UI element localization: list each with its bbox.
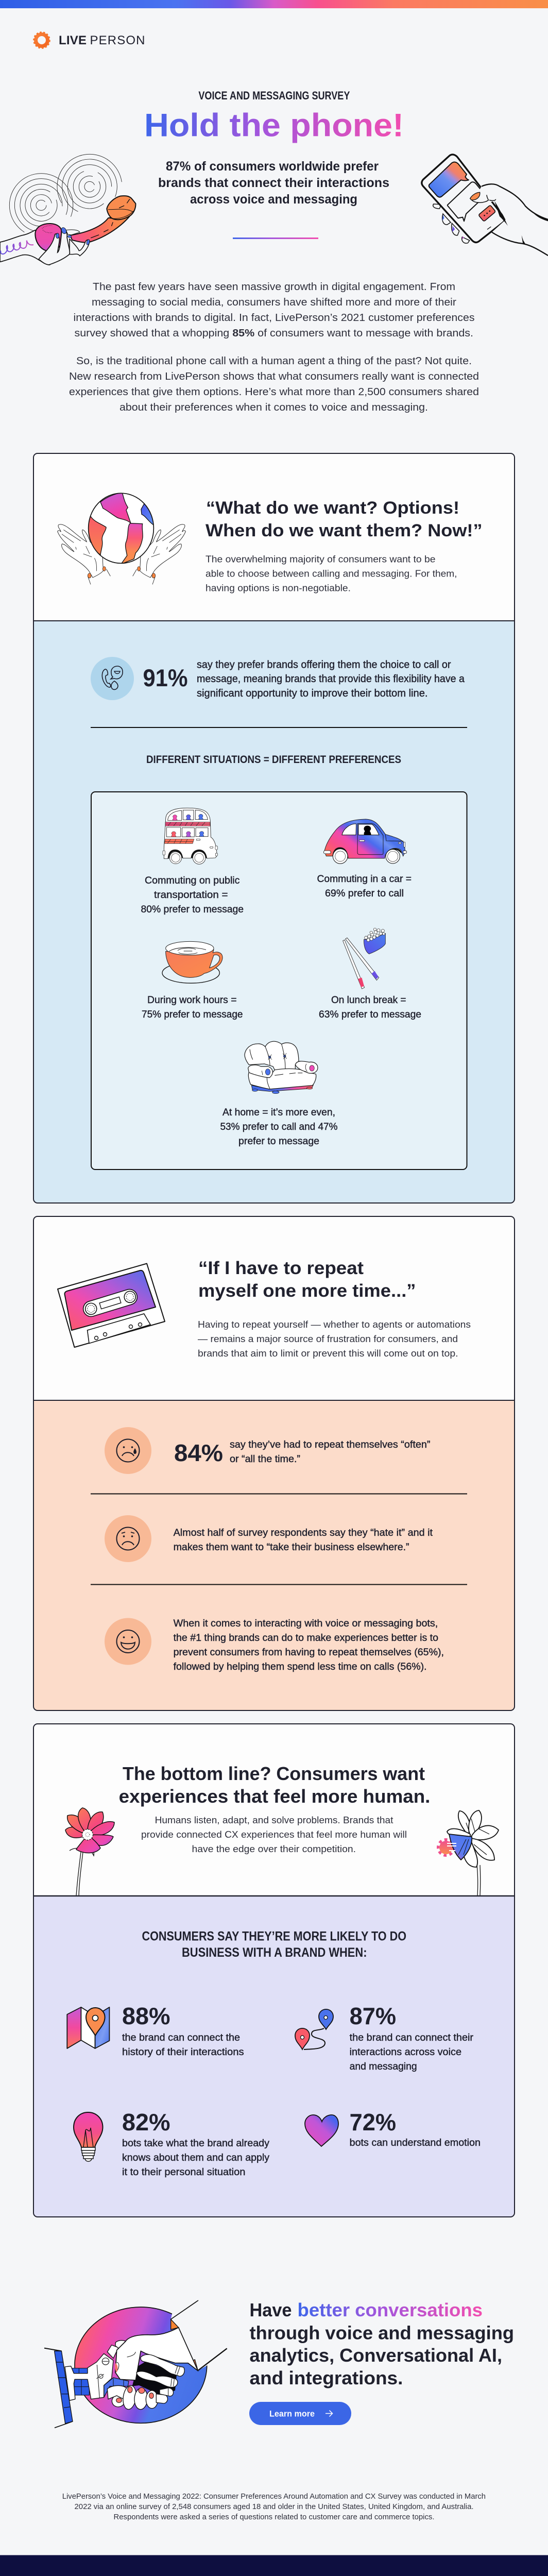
icon: happy face [105,1618,151,1665]
text: hate it: Almost half of survey respondents say they “hate it” and it [174,1528,433,1538]
heading: consumers say: CONSUMERS SAY THEY’RE MORE LIKELY TO DO [142,1929,406,1943]
panel: bottom line card [33,1724,515,2217]
eyebrow: voice and messaging survey: VOICE AND MESSAGING SURVEY [198,89,350,102]
icon: chopsticks and sushi [343,928,385,989]
heading: consumers say [142,1929,406,1960]
intro paragraph 1: messaging to social media, consumers have shifted more and more of their [92,297,456,308]
heading: bottom line [119,1763,430,1807]
heading: consumers say: BUSINESS WITH A BRAND WHEN: [182,1945,367,1960]
stat: 87 percent: 87% [350,2003,396,2029]
top gradient bar [0,0,548,8]
label: at home: 53% prefer to call and 47% [220,1122,338,1132]
label: lunch break: 63% prefer to message [319,1009,421,1020]
logo: LivePerson header: LIVE [59,33,87,47]
stat: 88 percent: 88% [122,2003,170,2029]
text: 82 percent description: knows about them and can apply [122,2153,270,2163]
text: bots repeat: prevent consumers from having to repeat themselves (65%), [174,1647,444,1658]
heading: have better conversations: and integrations. [249,2367,403,2388]
intro paragraph 1: interactions with brands to digital. In fact, LivePerson’s 2021 customer preferences [73,312,475,324]
heading: have better conversations: through voice and messaging [249,2323,514,2343]
text: 72 percent description: bots can understand emotion [350,2138,481,2148]
text: 91 percent description [197,659,465,699]
text: bottom line body: provide connected CX experiences that feel more human will [141,1829,407,1840]
intro paragraph 2: experiences that give them options. Here’s what more than 2,500 consumers shared [69,386,479,398]
heading: options quote: “What do we want? Options! [206,498,459,518]
text: 84 percent description: or “all the time.” [230,1454,300,1465]
subtitle: 87% of consumers worldwide prefer [166,159,379,174]
text: survey methodology note: LivePerson’s Voice and Messaging 2022: Consumer Preferences Around Automation and CX Survey was conducted in March [62,2492,486,2501]
label: at home [220,1107,338,1147]
text: options body: able to choose between calling and messaging. For them, [206,569,457,579]
text: 87 percent description: the brand can connect their [350,2032,474,2043]
panel: repeat card [33,1216,515,1710]
heading: repeat quote [198,1258,416,1301]
label: public transportation [141,875,244,915]
text: hate it [174,1528,433,1553]
button: learn more: Learn more [269,2409,315,2418]
heading: bottom line: experiences that feel more human. [119,1786,430,1807]
subtitle [158,159,389,207]
intro paragraph 1: The past few years have seen massive growth in digital engagement. From [93,281,455,293]
icon: double decker bus [163,808,217,864]
text: survey methodology note [62,2492,486,2521]
text: bots repeat: followed by helping them spend less time on calls (56%). [174,1662,427,1672]
label: lunch break [319,995,421,1020]
stat: 91 percent: 91% [143,664,187,691]
label: lunch break: On lunch break = [331,995,406,1006]
label: work hours [142,995,243,1020]
label: public transportation: 80% prefer to message [141,904,244,915]
intro paragraph 2: about their preferences when it comes to voice and messaging. [119,402,428,413]
heading: different situations: DIFFERENT SITUATIONS = DIFFERENT PREFERENCES [146,754,401,766]
illustration: human and robot handshake [44,2300,227,2428]
text: 87 percent description [350,2032,474,2072]
text: 82 percent description: it to their personal situation [122,2167,245,2178]
text: bots repeat: the #1 thing brands can do to make experiences better is to [174,1633,438,1643]
text: repeat body [198,1319,471,1359]
panel: footer [0,2555,548,2576]
heading: options quote [206,498,482,540]
illustration: hand holding telephone handset [0,142,135,265]
text: bots repeat [174,1618,444,1672]
icon: folded map with pin [67,2007,109,2048]
subtitle: brands that connect their interactions [158,176,389,190]
label: work hours: During work hours = [147,995,237,1006]
subtitle: across voice and messaging [190,192,357,207]
heading: have better conversations: analytics, Conversational AI, [249,2345,502,2366]
heading: bottom line: The bottom line? Consumers want [123,1763,425,1784]
label: at home: prefer to message [238,1136,319,1147]
text: repeat body: — remains a major source of frustration for consumers, and [198,1333,458,1344]
text: 84 percent description: say they’ve had to repeat themselves “often” [230,1439,431,1450]
icon: coffee cup [162,941,222,983]
heading: have better conversations: Have [249,2299,292,2320]
illustration: white flower [438,1810,499,1896]
text: 84 percent description [230,1439,431,1465]
text: options body: having options is non-negotiable. [206,583,351,594]
icon: route with two pins [295,2009,333,2049]
divider: title underline [233,238,318,239]
stat: 84 percent: 84% [174,1439,223,1466]
intro paragraph 2: New research from LivePerson shows that what consumers really want is connected [69,371,479,382]
icon: phone and message in circle [91,657,134,700]
text: hate it: makes them want to “take their business elsewhere.” [174,1542,409,1553]
illustration: hands holding a globe [58,493,185,584]
heading: have better conversations: better conversations [298,2299,483,2320]
text: 91 percent description: message, meaning brands that provide this flexibility have a [197,673,465,685]
panel: situations [91,792,467,1170]
label: at home: At home = it’s more even, [222,1107,335,1118]
illustration: pink flower [65,1808,114,1896]
text: 88 percent description: history of their interactions [122,2047,244,2058]
icon: crying face [105,1427,151,1474]
logo: LivePerson header: PERSON [90,33,145,47]
label: in a car [317,874,412,899]
text: bottom line body: Humans listen, adapt, and solve problems. Brands that [155,1815,393,1825]
text: 91 percent description: significant opportunity to improve their bottom line. [197,688,427,699]
text: 88 percent description: the brand can connect the [122,2032,240,2043]
heading: have better conversations [249,2299,514,2388]
illustration: hand holding smartphone with chat bubbles [422,155,548,256]
button: learn more [249,2402,351,2425]
icon: car [323,819,406,863]
text: survey methodology note: 2022 via an online survey of 2,548 consumers aged 18 and older in the United States, United Kingdom, and Australia. [74,2502,474,2511]
panel: options card [33,453,515,1203]
icon: frowning face [105,1515,151,1562]
text: 82 percent description [122,2138,270,2178]
text: 82 percent description: bots take what the brand already [122,2138,270,2149]
text: options body [206,554,457,594]
intro paragraph 1: survey showed that a whopping 85% of consumers want to message with brands. [74,328,473,339]
heading: repeat quote: “If I have to repeat [198,1258,364,1278]
text: repeat body: Having to repeat yourself — whether to agents or automations [198,1319,471,1330]
title: Hold the phone!: Hold the phone! [144,107,404,143]
icon: armchair [245,1041,318,1094]
stat: 72 percent: 72% [350,2109,396,2136]
text: bots repeat: When it comes to interacting with voice or messaging bots, [174,1618,438,1629]
label: public transportation: Commuting on public [145,875,240,886]
illustration: cassette tape [58,1263,165,1347]
text: 87 percent description: interactions across voice [350,2047,461,2058]
icon: light bulb [74,2112,103,2161]
heading: repeat quote: myself one more time...” [198,1281,416,1301]
label: in a car: Commuting in a car = [317,874,412,885]
icon: heart [305,2115,338,2146]
label: in a car: 69% prefer to call [325,888,404,899]
stat: 82 percent: 82% [122,2109,170,2136]
text: survey methodology note: Respondents were asked a series of questions related to customer care and commerce topics. [113,2513,435,2521]
text: 87 percent description: and messaging [350,2061,417,2072]
heading: options quote: When do we want them? Now!” [206,521,482,540]
text: 88 percent description [122,2032,244,2058]
text: 91 percent description: say they prefer brands offering them the choice to call or [197,659,451,671]
label: public transportation: transportation = [154,890,228,901]
text: options body: The overwhelming majority of consumers want to be [206,554,436,565]
text: repeat body: brands that aim to limit or prevent this will come out on top. [198,1348,458,1359]
intro paragraph 2 [69,355,479,413]
intro paragraph 1 [73,281,475,339]
text: bottom line body [141,1815,407,1854]
intro paragraph 2: So, is the traditional phone call with a human agent a thing of the past? Not quite. [76,355,472,367]
label: work hours: 75% prefer to message [142,1009,243,1020]
text: bottom line body: have the edge over their competition. [192,1843,356,1854]
logo: LivePerson header [34,32,145,48]
